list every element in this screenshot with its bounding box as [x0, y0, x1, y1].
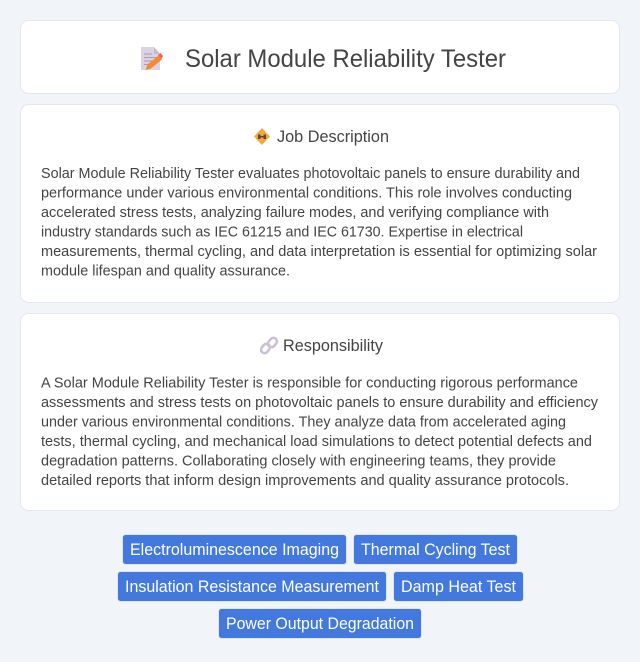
icon: chain link	[260, 336, 278, 355]
text block: responsibility: detailed reports that inform design improvements and quality assurance protocols.	[41, 473, 569, 489]
text block: job description	[41, 166, 597, 280]
tag: insulation resistance measurement	[118, 572, 386, 602]
text block: job description: Solar Module Reliability Tester evaluates photovoltaic panels to ensure durability and	[41, 166, 580, 182]
text block: job description: module lifespan and quality assurance.	[41, 264, 290, 280]
panel: title card	[20, 20, 620, 94]
heading: responsibility: Responsibility	[283, 337, 384, 355]
icon: diamond sign	[254, 128, 270, 145]
panel: job description	[20, 104, 620, 302]
text block: responsibility	[41, 376, 599, 489]
panel: responsibility	[20, 314, 620, 510]
text block: responsibility: under various environmental conditions. They analyze data from accelerated aging	[41, 414, 566, 430]
tag: electroluminescence imaging	[122, 534, 346, 564]
icon: memo with pencil	[141, 47, 163, 70]
text block: responsibility: assessments and stress tests on photovoltaic panels to ensure durability and efficiency	[41, 395, 599, 411]
tags	[118, 534, 524, 638]
tag: electroluminescence imaging: Electroluminescence Imaging	[130, 541, 339, 559]
text block: responsibility: A Solar Module Reliability Tester is responsible for conducting rigorous performance	[41, 376, 578, 392]
text block: responsibility: degradation patterns. Collaborating closely with engineering teams, they provide	[41, 454, 556, 470]
title: Solar Module Reliability Tester	[185, 45, 506, 73]
tag: power output degradation	[218, 608, 422, 638]
text block: responsibility: tests, thermal cycling, and mechanical load simulations to detect potential defects and	[41, 434, 592, 450]
tag: damp heat test: Damp Heat Test	[401, 578, 516, 596]
tag: thermal cycling test: Thermal Cycling Test	[361, 541, 510, 559]
tag: insulation resistance measurement: Insulation Resistance Measurement	[125, 578, 379, 596]
text block: job description: measurements, thermal cycling, and data interpretation is essential for optimizing solar	[41, 244, 597, 260]
tag: power output degradation: Power Output Degradation	[226, 615, 414, 633]
heading: job description: Job Description	[277, 128, 389, 146]
tag: thermal cycling test	[354, 534, 518, 564]
text block: job description: industry standards such as IEC 61215 and IEC 61730. Expertise in electrical	[41, 224, 523, 240]
tag: damp heat test	[394, 572, 524, 602]
text block: job description: accelerated stress tests, analyzing failure modes, and verifying compliance with	[41, 205, 549, 221]
text block: job description: performance under various environmental conditions. This role involves conducting	[41, 186, 572, 202]
